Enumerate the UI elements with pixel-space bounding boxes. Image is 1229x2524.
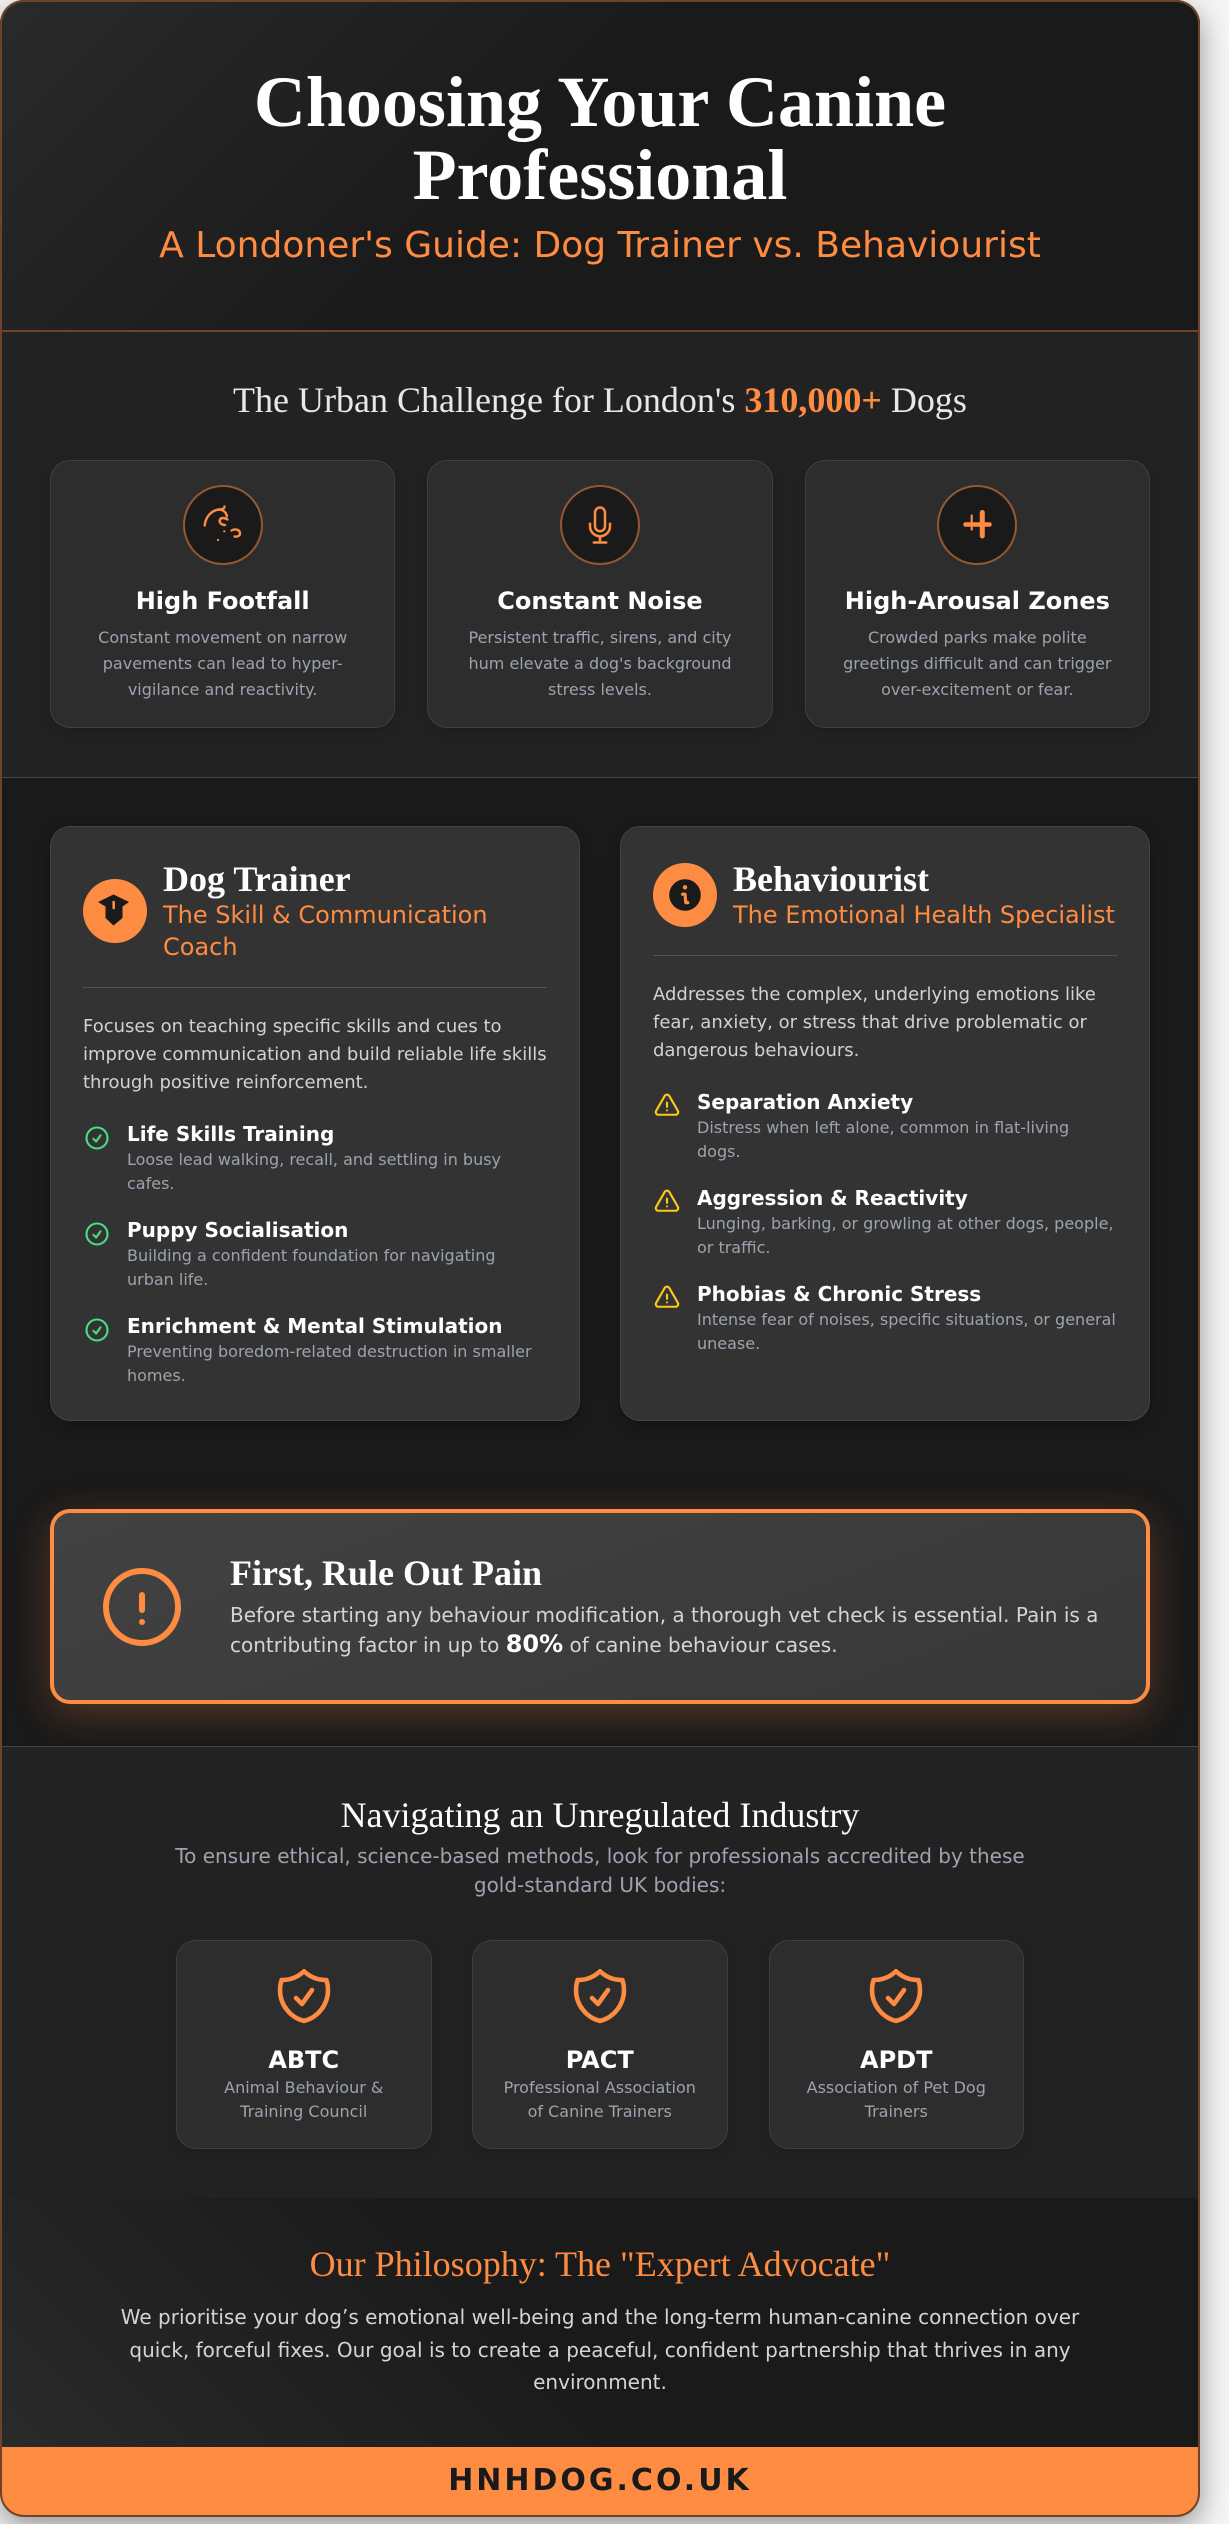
description: constant noise: Persistent traffic, sirens, and city [468, 628, 731, 647]
text: puppy socialisation [127, 1246, 496, 1289]
title: Choosing Your Canine [254, 62, 946, 142]
footer brand: HNHDOG.CO.UK [448, 2463, 752, 2498]
icon: shield [870, 1968, 922, 2024]
text: separation anxiety: Distress when left alone, common in flat-living [697, 1118, 1069, 1137]
icon: warning [654, 1286, 680, 1308]
icon: crossed bars [937, 485, 1017, 565]
subtitle: behaviourist: The Emotional Health Specialist [733, 901, 1115, 929]
title: dog trainer: Dog Trainer [163, 859, 351, 899]
description: dog trainer: Focuses on teaching specific skills and cues to [83, 1016, 502, 1036]
card: ABTC [176, 1940, 432, 2149]
description: ABTC: Animal Behaviour & [224, 2078, 383, 2097]
label: high footfall: High Footfall [136, 586, 310, 614]
philosophy text [121, 2305, 1080, 2394]
intro text: gold-standard UK bodies: [474, 1873, 726, 1897]
text: separation anxiety [697, 1118, 1069, 1161]
card: high-arousal zones [805, 460, 1150, 728]
text: enrichment: homes. [127, 1366, 186, 1385]
description: high footfall: Constant movement on narrow [98, 628, 347, 647]
text: aggression and reactivity: Lunging, barking, or growling at other dogs, people, [697, 1214, 1114, 1233]
text: life skills training [127, 1150, 501, 1193]
intro text [175, 1844, 1025, 1897]
subtitle: dog trainer [162, 901, 488, 961]
icon: warning [654, 1190, 680, 1212]
text: phobias and chronic stress [697, 1310, 1116, 1353]
label: separation anxiety: Separation Anxiety [697, 1090, 913, 1114]
description: constant noise: hum elevate a dog's background [468, 654, 732, 673]
description: dog trainer [83, 1016, 547, 1092]
heading: unregulated industry: Navigating an Unregulated Industry [341, 1795, 859, 1835]
text: aggression and reactivity [697, 1214, 1114, 1257]
description: high-arousal zones: over-excitement or fear. [881, 680, 1074, 699]
icon: trainer badge [83, 879, 147, 943]
icon: shield [278, 1968, 330, 2024]
subtitle: dog trainer: Coach [163, 933, 238, 961]
philosophy text: quick, forceful fixes. Our goal is to create a peaceful, confident partnership that thrives in any [129, 2338, 1071, 2362]
card: constant noise [427, 460, 773, 728]
heading: philosophy: Our Philosophy: The "Expert Advocate" [310, 2244, 890, 2284]
description: PACT [504, 2078, 696, 2121]
label: life skills training: Life Skills Training [127, 1122, 334, 1146]
description: APDT: Trainers [865, 2102, 928, 2121]
item: puppy socialisation [85, 1218, 496, 1289]
panel: behaviourist [620, 826, 1150, 1421]
text: puppy socialisation: urban life. [127, 1270, 208, 1289]
label: constant noise: Constant Noise [497, 586, 703, 614]
label: PACT: PACT [566, 2046, 634, 2074]
description: ABTC [224, 2078, 383, 2121]
header panel [0, 0, 1200, 332]
panel: unregulated industry [0, 1746, 1200, 2198]
text: life skills training: Loose lead walking, recall, and settling in busy [127, 1150, 501, 1169]
description: PACT: Professional Association [504, 2078, 696, 2097]
title: behaviourist: Behaviourist [733, 859, 929, 899]
philosophy text: environment. [533, 2370, 667, 2394]
title [254, 62, 946, 215]
icon: warning [654, 1094, 680, 1116]
description: high-arousal zones: Crowded parks make polite [868, 628, 1087, 647]
label: enrichment: Enrichment & Mental Stimulation [127, 1314, 503, 1338]
description: constant noise: stress levels. [548, 680, 652, 699]
card: APDT [768, 1940, 1024, 2149]
text: aggression and reactivity: or traffic. [697, 1238, 770, 1257]
callout: first, rule out pain [50, 1509, 1150, 1704]
description: dog trainer: through positive reinforcement. [83, 1072, 368, 1092]
label: high-arousal zones: High-Arousal Zones [845, 586, 1110, 614]
text: enrichment: Preventing boredom-related destruction in smaller [127, 1342, 532, 1361]
panel: philosophy [0, 2198, 1200, 2447]
icon: check [85, 1126, 109, 1150]
icon: footfall [183, 485, 263, 565]
text: life skills training: cafes. [127, 1174, 174, 1193]
description: PACT: of Canine Trainers [528, 2102, 672, 2121]
callout text [230, 1602, 1098, 1658]
card: PACT [472, 1940, 728, 2149]
subtitle: A Londoner's Guide: Dog Trainer vs. Behaviourist [159, 225, 1041, 266]
description: behaviourist: fear, anxiety, or stress that drive problematic or [653, 1012, 1087, 1032]
description: APDT [806, 2078, 986, 2121]
icon: check [85, 1318, 108, 1342]
icon: shield [574, 1968, 626, 2024]
callout text: Before starting any behaviour modification, a thorough vet check is essential. Pain is a [230, 1602, 1098, 1626]
icon: alert circle [103, 1568, 181, 1646]
card: high footfall [50, 460, 395, 728]
panel: urban challenge [0, 332, 1200, 778]
item: separation anxiety [654, 1090, 1069, 1161]
description: high footfall: pavements can lead to hyper- [103, 654, 343, 673]
label: aggression and reactivity: Aggression & Reactivity [697, 1186, 968, 1210]
subtitle: dog trainer: The Skill & Communication [163, 901, 488, 929]
label: ABTC: ABTC [268, 2046, 339, 2074]
text: phobias and chronic stress: unease. [697, 1334, 760, 1353]
text: enrichment [127, 1342, 532, 1385]
description: ABTC: Training Council [240, 2102, 367, 2121]
label: phobias and chronic stress: Phobias & Chronic Stress [697, 1282, 981, 1306]
philosophy text: We prioritise your dog’s emotional well-being and the long-term human-canine connection over [121, 2305, 1079, 2329]
description: behaviourist [653, 984, 1096, 1060]
label: APDT: APDT [860, 2046, 932, 2074]
description: behaviourist: Addresses the complex, underlying emotions like [653, 984, 1096, 1004]
footer [0, 2447, 1200, 2517]
description: dog trainer: improve communication and build reliable life skills [83, 1044, 547, 1064]
description: high-arousal zones: greetings difficult and can trigger [843, 654, 1112, 673]
callout text: contributing factor in up to 80% of canine behaviour cases. [230, 1630, 838, 1658]
heading: urban challenge: The Urban Challenge for London's 310,000+ Dogs [233, 380, 967, 420]
text: phobias and chronic stress: Intense fear of noises, specific situations, or general [697, 1310, 1116, 1329]
intro text: To ensure ethical, science-based methods, look for professionals accredited by these [175, 1844, 1025, 1868]
description: high footfall [98, 628, 347, 699]
title: Professional [413, 135, 787, 215]
panel: dog trainer [50, 826, 580, 1421]
label: puppy socialisation: Puppy Socialisation [127, 1218, 348, 1242]
item: life skills training [85, 1122, 501, 1193]
description: constant noise [468, 628, 732, 699]
description: APDT: Association of Pet Dog [807, 2078, 986, 2097]
text: separation anxiety: dogs. [697, 1142, 741, 1161]
item: enrichment [85, 1314, 532, 1385]
callout heading: First, Rule Out Pain [230, 1553, 542, 1593]
icon: microphone [560, 485, 640, 565]
panel: comparison and callout [0, 778, 1200, 1746]
text: puppy socialisation: Building a confident foundation for navigating [127, 1246, 496, 1265]
item: aggression and reactivity [654, 1186, 1114, 1257]
description: behaviourist: dangerous behaviours. [653, 1040, 859, 1060]
icon: check [85, 1222, 108, 1246]
icon: info [653, 863, 717, 927]
description: high footfall: vigilance and reactivity. [128, 680, 318, 699]
item: phobias and chronic stress [654, 1282, 1116, 1353]
description: high-arousal zones [843, 628, 1112, 699]
